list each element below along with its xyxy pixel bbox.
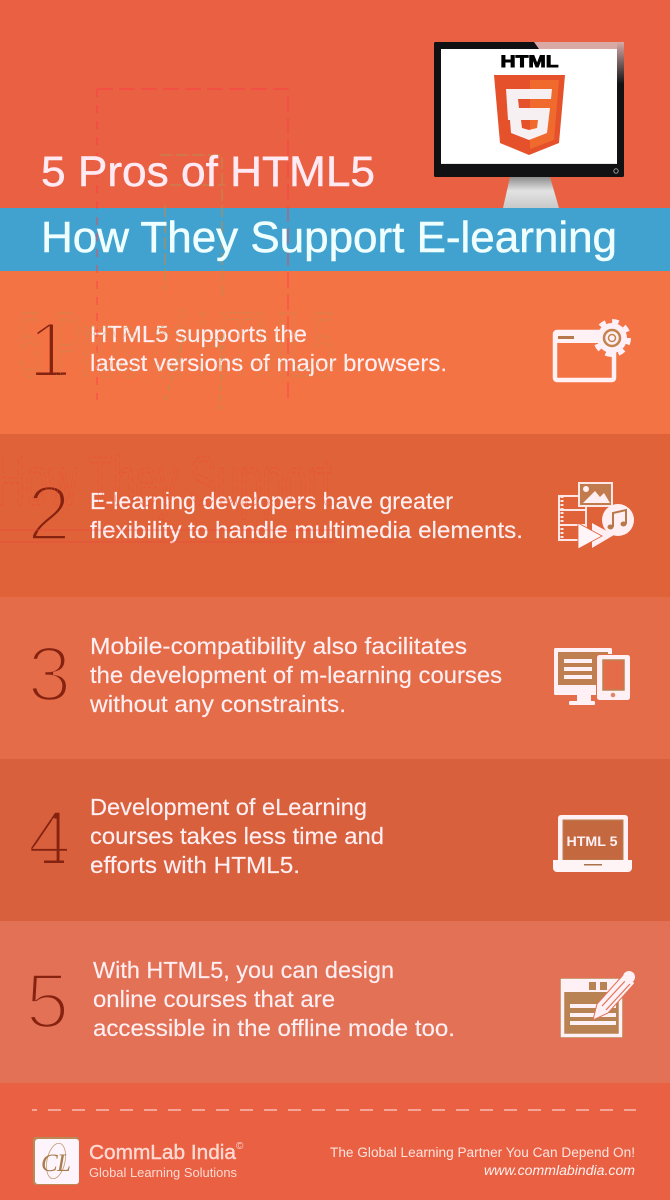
number 3: 3: [28, 630, 71, 718]
number 1: 1: [28, 306, 72, 394]
icon: desktop and tablet: [554, 648, 631, 705]
text: item 1: HTML5 supports the: [90, 321, 307, 347]
text: item 2: flexibility to handle multimedia elements.: [90, 517, 523, 543]
text: item 5: With HTML5, you can design: [93, 957, 394, 983]
text: item 5: accessible in the offline mode too.: [93, 1015, 455, 1041]
copyright mark: ©: [236, 1141, 244, 1152]
number 5: 5: [26, 956, 69, 1044]
text: item 4: efforts with HTML5.: [90, 852, 300, 878]
icon: monitor with HTML5 logo: [434, 42, 624, 208]
decorative ghost artefacts: [0, 89, 335, 542]
panel: item 3: [0, 597, 670, 759]
text: item 4: courses takes less time and: [90, 823, 384, 849]
panel: header: [0, 0, 670, 208]
text: item 3: without any constraints.: [89, 691, 346, 717]
text: website: www.commlabindia.com: [484, 1163, 635, 1178]
text: item 4: Development of eLearning: [90, 794, 367, 820]
panel: item 2: [0, 434, 670, 597]
text: item 1: latest versions of major browsers.: [90, 350, 447, 376]
logo: CL mark: C: [41, 1150, 58, 1177]
text: tagline: The Global Learning Partner You Can Depend On!: [330, 1145, 635, 1160]
panel: footer: [0, 1083, 670, 1200]
number 4: 4: [28, 794, 71, 882]
icon: laptop with HTML 5: [553, 815, 632, 872]
panel: item 5: [0, 921, 670, 1083]
logo: CL mark: [33, 1137, 79, 1185]
icon: monitor with HTML5 logo: HTML: [500, 52, 558, 71]
text: item 3: the development of m-learning courses: [90, 662, 502, 688]
icon: multimedia: [559, 483, 634, 549]
panel: item 1: [0, 271, 670, 434]
panel: title band: [0, 208, 670, 271]
icon: window with pencil: [560, 971, 635, 1038]
heading: How They Support E-learning: How They Support E-learning: [41, 213, 617, 262]
text: item 3: Mobile-compatibility also facilitates: [90, 633, 467, 659]
icon: laptop with HTML 5: HTML 5: [566, 833, 618, 849]
heading: 5 Pros of HTML5: 5 Pros of HTML5: [41, 148, 375, 196]
number 2: 2: [27, 469, 71, 557]
icon: browser window with gear: [555, 322, 628, 380]
text: item 2: E-learning developers have greater: [90, 488, 453, 514]
logo tagline: Global Learning Solutions: [89, 1165, 237, 1180]
panel: item 4: [0, 759, 670, 921]
text: item 5: online courses that are: [93, 986, 335, 1012]
decorative ghost artefacts: How They Support: [0, 442, 332, 520]
logo text: CommLab India: CommLab India: [89, 1142, 237, 1164]
logo: CL mark: L: [56, 1150, 71, 1177]
